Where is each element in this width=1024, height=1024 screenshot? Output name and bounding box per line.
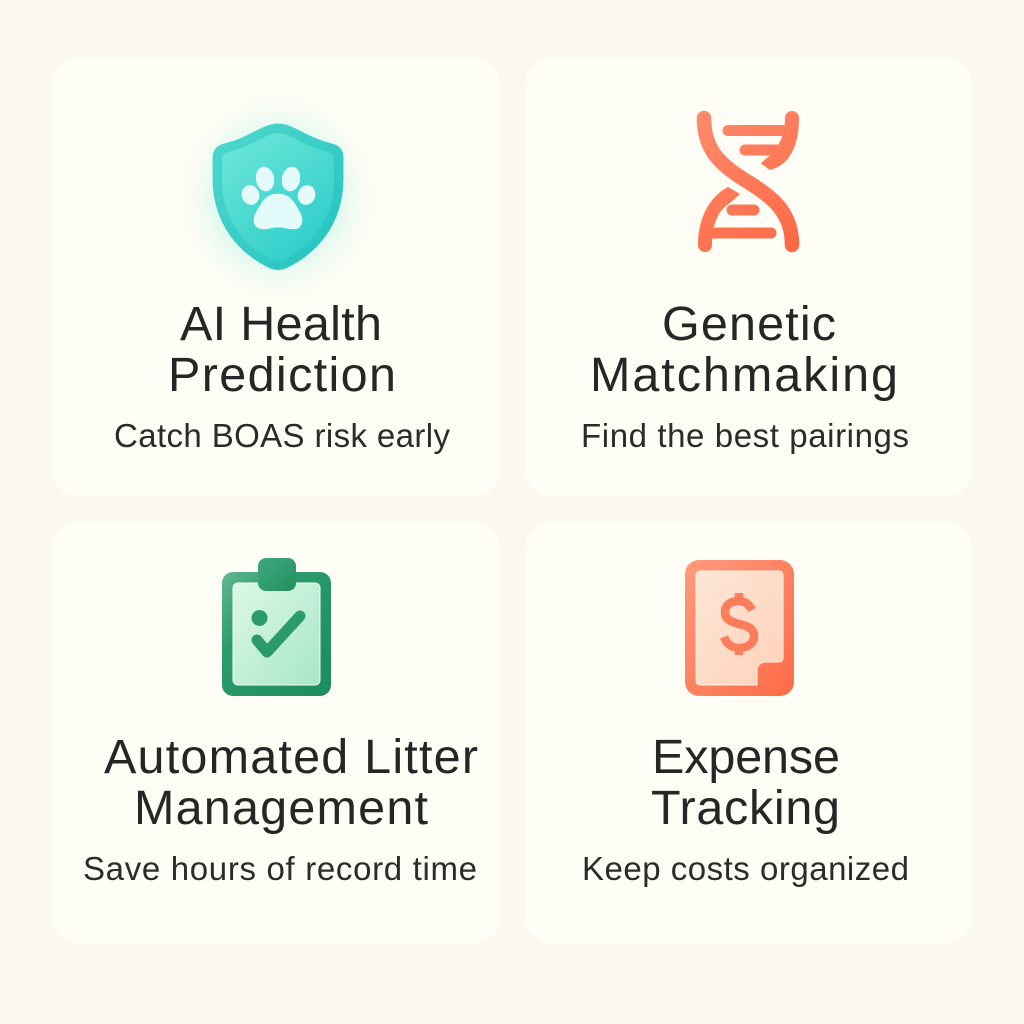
heading: Expense Tracking: [651, 730, 840, 835]
panel: Automated Litter Management: [52, 521, 500, 944]
text: Save hours of record time: Save hours of record time: [83, 850, 477, 887]
heading: Genetic Matchmaking: Genetic: [662, 297, 836, 351]
text: Keep costs organized: Keep costs organized: [582, 850, 909, 887]
icon: shield with paw: [180, 93, 376, 301]
panel: Expense Tracking: [525, 521, 972, 944]
panel: AI Health Prediction: [52, 57, 500, 497]
heading: Genetic Matchmaking: Matchmaking: [590, 348, 898, 402]
text: Catch BOAS risk early: Catch BOAS risk early: [114, 417, 450, 454]
heading: AI Health Prediction: [168, 297, 396, 402]
heading: AI Health Prediction: Prediction: [168, 348, 396, 402]
text: Find the best pairings: Find the best pairings: [581, 417, 909, 454]
heading: Expense Tracking: Expense: [652, 730, 840, 784]
heading: Expense Tracking: Tracking: [651, 781, 840, 835]
heading: Automated Litter Management: Management: [134, 781, 429, 835]
heading: Genetic Matchmaking: [590, 297, 898, 402]
icon: clipboard with check: [222, 558, 331, 696]
heading: Automated Litter Management: Automated Litter: [104, 730, 478, 784]
panel: Genetic Matchmaking: [525, 57, 972, 497]
heading: AI Health Prediction: AI Health: [180, 297, 382, 351]
heading: Automated Litter Management: [104, 730, 478, 835]
icon: DNA helix: [698, 111, 799, 252]
icon: invoice with dollar sign: [685, 560, 794, 696]
